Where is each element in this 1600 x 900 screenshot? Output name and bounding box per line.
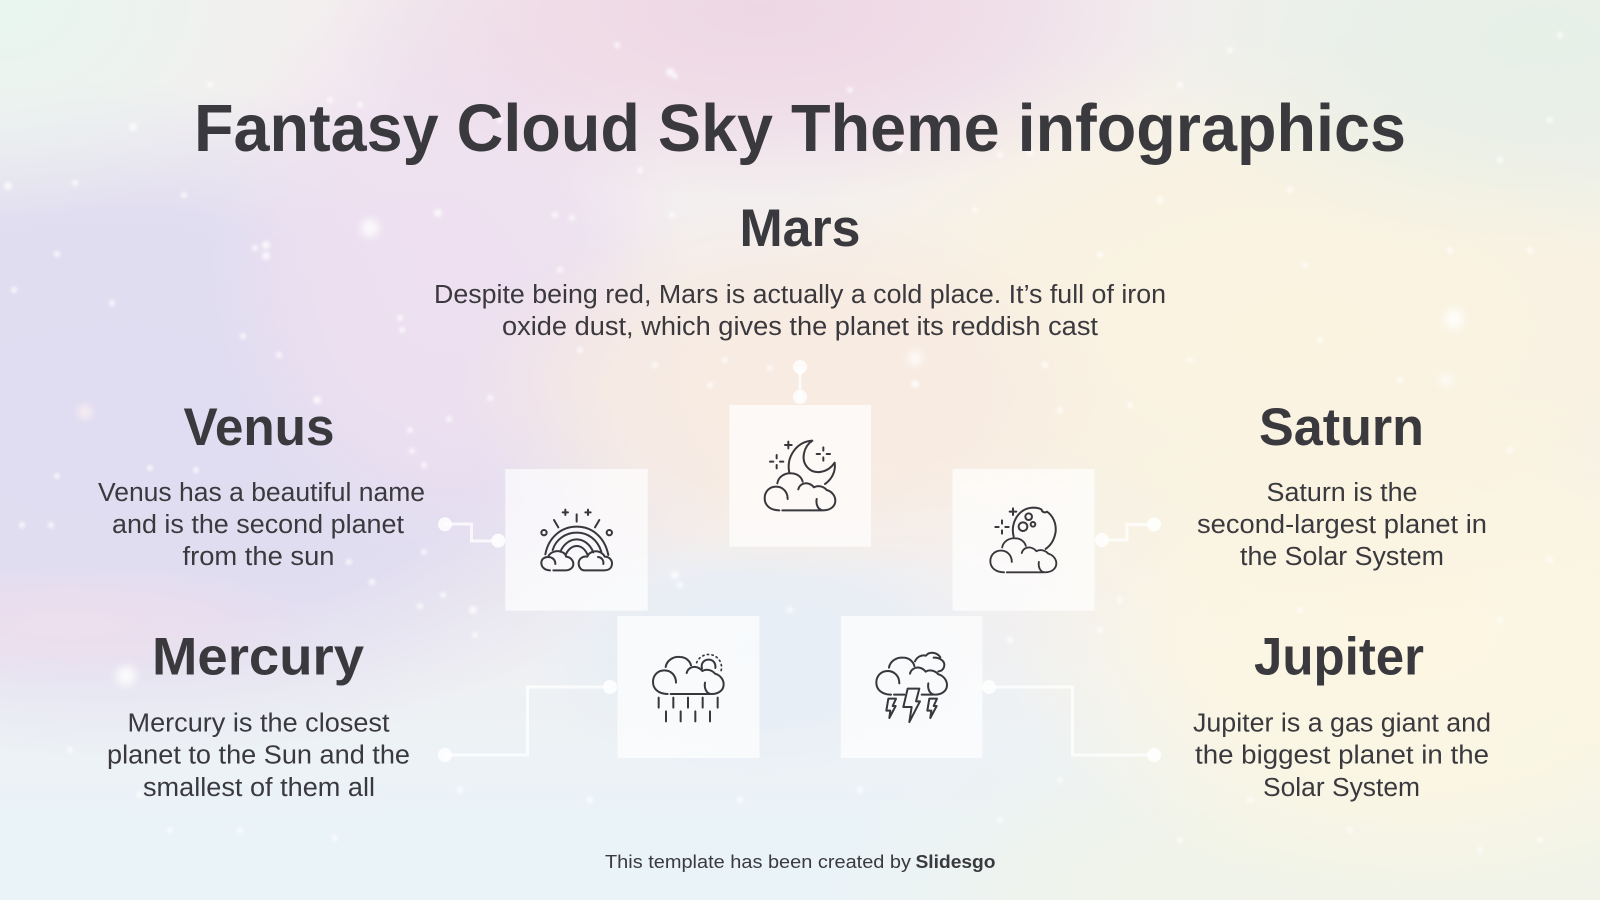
text: Mercury description: smallest of them all	[143, 774, 375, 802]
icon box: moon and cloud	[729, 405, 871, 547]
text: Venus description: Venus has a beautiful name	[98, 479, 425, 507]
connector: Mars	[793, 360, 807, 404]
connector: Jupiter	[982, 680, 1161, 762]
icon: crescent moon	[765, 441, 835, 510]
text: Saturn description	[1197, 479, 1487, 571]
panel: Jupiter	[841, 616, 1491, 802]
text: Mars description: oxide dust, which gives the planet its reddish cast	[502, 313, 1098, 341]
panel: Saturn	[952, 398, 1487, 611]
icon box: thunderstorm	[841, 616, 982, 758]
icon box: rainbow	[505, 469, 648, 611]
heading: Jupiter: Jupiter	[1254, 628, 1424, 686]
icon: full moon and cloud	[990, 508, 1056, 572]
text: Saturn description: the Solar System	[1240, 543, 1444, 571]
text: Saturn description: second-largest planet in	[1197, 511, 1487, 539]
connector: Venus	[438, 517, 505, 548]
footer credit: This template has been created by	[605, 851, 912, 872]
text: Mercury description: Mercury is the closest	[128, 710, 390, 738]
panel: Mercury	[107, 616, 760, 802]
connector: Saturn	[1095, 518, 1161, 547]
text: Mercury description	[107, 710, 410, 802]
text: Venus description	[98, 479, 425, 571]
text: Mars description: Despite being red, Mars is actually a cold place. It’s full of iron	[434, 281, 1166, 309]
heading: Mars: Mars	[740, 199, 860, 258]
connector: Mercury	[438, 680, 617, 762]
icon box: rain and sun	[618, 616, 760, 758]
icon box: full moon	[952, 469, 1094, 611]
heading: Mercury: Mercury	[152, 628, 365, 686]
title: Fantasy Cloud Sky Theme infographics	[194, 91, 1406, 166]
icon: rainbow	[541, 510, 612, 570]
text: Saturn description: Saturn is the	[1266, 479, 1418, 507]
panel: Venus	[98, 398, 648, 611]
text: Jupiter description: Solar System	[1263, 774, 1420, 802]
text: Venus description: and is the second planet	[112, 511, 404, 539]
icon: storm cloud with lightning	[876, 653, 947, 722]
text: Mercury description: planet to the Sun and the	[107, 742, 410, 770]
heading: Saturn: Saturn	[1259, 398, 1424, 457]
text: Venus description: from the sun	[182, 543, 334, 571]
text: Jupiter description: Jupiter is a gas giant and	[1193, 710, 1491, 738]
footer credit: Slidesgo	[916, 851, 996, 872]
text: Mars description	[434, 281, 1166, 341]
text: Jupiter description: the biggest planet in the	[1195, 742, 1489, 770]
heading: Venus: Venus	[184, 398, 334, 457]
text: Jupiter description	[1193, 710, 1491, 802]
panel: Mars	[434, 199, 1166, 547]
icon: rain cloud with sun	[653, 654, 724, 721]
